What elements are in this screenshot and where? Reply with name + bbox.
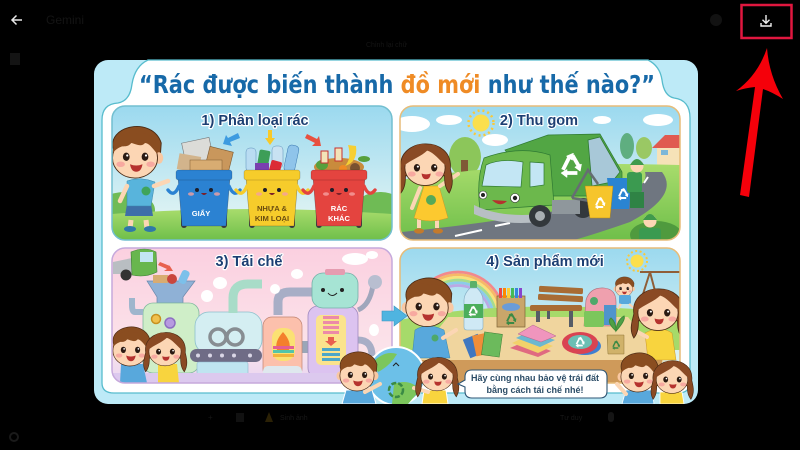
food waste pile — [314, 145, 370, 170]
foreground characters cut by card — [336, 347, 693, 405]
blue bin GIẤY — [168, 170, 240, 228]
card background — [94, 60, 698, 404]
ground and road — [400, 164, 680, 240]
recycled frisbees — [562, 332, 601, 355]
girl pointing at truck — [398, 144, 458, 234]
earth globe — [367, 347, 425, 405]
heading: step 3: 3) Tái chế — [216, 254, 283, 270]
panel 2: collection — [394, 106, 682, 249]
wooden bench — [530, 286, 583, 327]
infographic card — [94, 60, 698, 405]
heading: step 4: 4) Sản phẩm mới — [486, 254, 604, 270]
girl hugging globe — [414, 358, 459, 404]
sun — [627, 251, 647, 271]
boy hugging globe — [336, 352, 380, 404]
two kids watching — [109, 327, 187, 383]
house — [652, 135, 680, 165]
glass tank with gears — [190, 312, 262, 377]
panel 3 border — [112, 248, 392, 383]
panel 3: recycling machines — [109, 248, 392, 383]
panel 1: sorting waste — [112, 106, 392, 240]
faint bottom toolbar: + — [208, 413, 213, 422]
red highlight box around download button — [742, 5, 792, 38]
arrow between panels 3 and 4 — [382, 306, 407, 326]
faint bottom toolbar: Sinh ảnh — [280, 415, 308, 422]
faint bottom toolbar — [10, 412, 614, 441]
arrows towards bins — [223, 130, 321, 146]
boy pointing at bins — [108, 127, 168, 232]
heading: step 1: 1) Phân loại rác — [201, 113, 309, 129]
trees — [449, 133, 652, 172]
small boy playing — [614, 277, 635, 309]
red bin RÁC KHÁC: RÁC — [331, 204, 348, 213]
notebooks — [463, 332, 502, 358]
yellow bin NHỰA & KIM LOẠI: NHỰA & — [257, 204, 288, 213]
sun — [468, 110, 494, 136]
input waste and hopper — [147, 262, 195, 303]
two kids waving — [617, 353, 693, 404]
crayon box — [497, 288, 525, 327]
small green truck — [113, 249, 157, 280]
faint bottom toolbar: Tư duy — [560, 415, 583, 422]
main title: “Rác được biến thành đồ mới như thế nào?” — [139, 70, 655, 99]
panel 4: new products — [400, 248, 685, 383]
yellow bin NHỰA & KIM LOẠI — [236, 170, 308, 228]
rainbow — [433, 270, 499, 308]
yellow and blue bins on the lift — [585, 178, 632, 218]
panel 1 border — [112, 106, 392, 240]
grass — [400, 307, 680, 350]
green shredder machine — [132, 298, 199, 373]
friendly robot press — [308, 269, 382, 378]
blue bin GIẤY: GIẤY — [192, 208, 210, 218]
white inner panel with title tab — [102, 60, 690, 393]
speech bubble: bằng cách tái chế nhé! — [486, 384, 584, 395]
top bar: back arrow and faint app name — [10, 13, 722, 65]
yellow bin NHỰA & KIM LOẠI: KIM LOẠI — [255, 214, 289, 223]
recycled bottle — [464, 281, 483, 330]
backpack — [584, 288, 616, 327]
bottles and cans — [246, 144, 300, 170]
clouds — [394, 114, 673, 146]
top bar: back arrow and faint app name: Gemini — [46, 13, 84, 27]
speech bubble — [458, 370, 607, 398]
furnace — [263, 317, 302, 378]
floor strip — [113, 373, 341, 382]
heading: step 2: 2) Thu gom — [500, 113, 578, 129]
panel 2 border — [400, 106, 680, 240]
panel 4 border — [400, 248, 680, 383]
big red arrow pointing up — [736, 48, 783, 197]
girl presenting — [631, 289, 685, 360]
top bar: back arrow and faint app name: Chỉnh lại chữ — [366, 41, 408, 49]
paper and cardboard pile — [177, 137, 233, 174]
curved connecting pipes — [233, 284, 372, 356]
download icon — [761, 15, 771, 26]
steam clouds — [201, 251, 379, 336]
plant in pot — [607, 316, 624, 354]
worker by the truck — [627, 159, 644, 208]
red bin RÁC KHÁC — [303, 170, 375, 228]
red bin RÁC KHÁC: KHÁC — [328, 214, 350, 223]
speech bubble: Hãy cùng nhau bảo vệ trái đất — [471, 373, 599, 383]
boy presenting — [402, 278, 456, 358]
stack of notebooks — [510, 325, 556, 357]
green garbage truck — [474, 134, 622, 227]
worker in the bushes — [630, 214, 679, 240]
wooden table — [412, 317, 664, 383]
swing frame — [640, 271, 680, 294]
